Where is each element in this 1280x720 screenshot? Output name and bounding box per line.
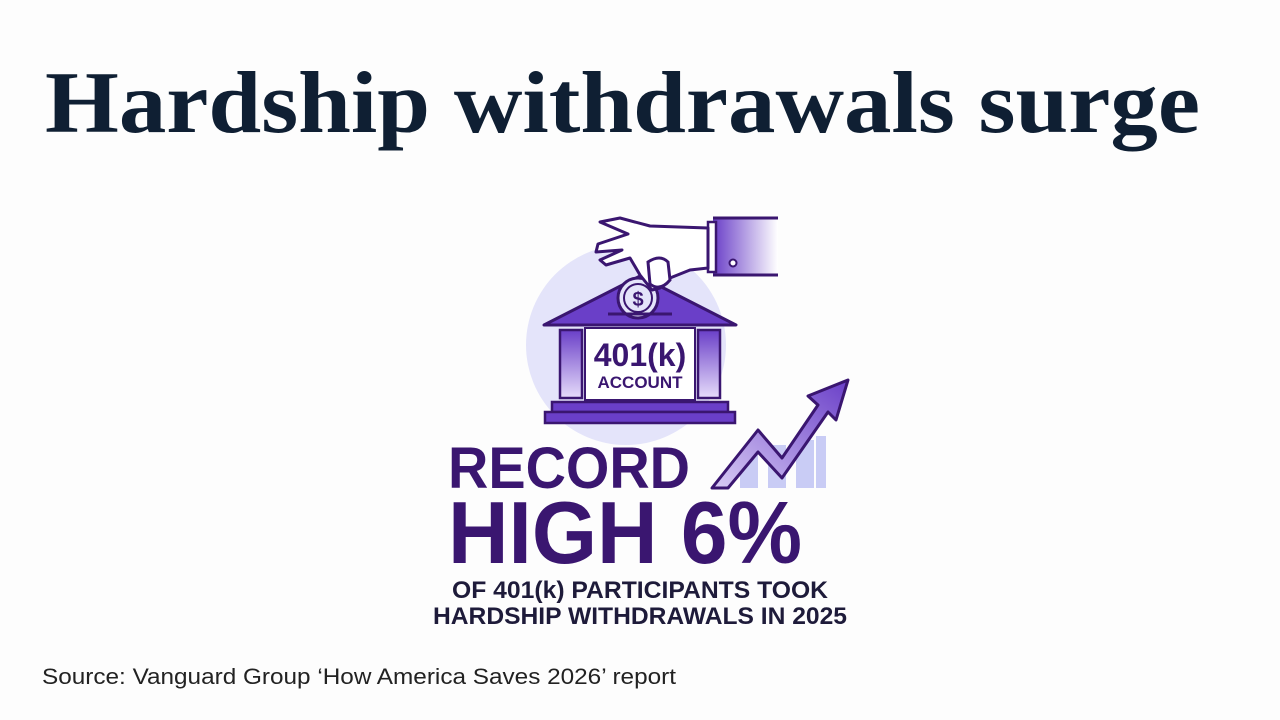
headline stat: RECORD [448, 436, 690, 501]
steps [552, 402, 728, 412]
account panel: 401(k) [594, 337, 686, 373]
headline stat [448, 436, 802, 582]
columns [560, 330, 582, 398]
background circle [526, 245, 726, 445]
title: Hardship withdrawals surge [45, 55, 1200, 152]
source: Source: Vanguard Group ‘How America Saves 2026’ report [42, 664, 676, 689]
subtitle text: HARDSHIP WITHDRAWALS IN 2025 [433, 603, 847, 630]
icon: 401k bank illustration [526, 218, 778, 445]
coin [618, 278, 658, 318]
coin: $ [632, 289, 644, 311]
account panel [585, 328, 695, 400]
subtitle text: OF 401(k) PARTICIPANTS TOOK [452, 577, 829, 604]
subtitle text [433, 577, 847, 630]
headline stat: HIGH 6% [448, 483, 802, 582]
account panel: ACCOUNT [598, 373, 683, 392]
chart: rising arrow with bars [712, 380, 848, 488]
hand [596, 218, 778, 290]
roof [544, 276, 736, 325]
